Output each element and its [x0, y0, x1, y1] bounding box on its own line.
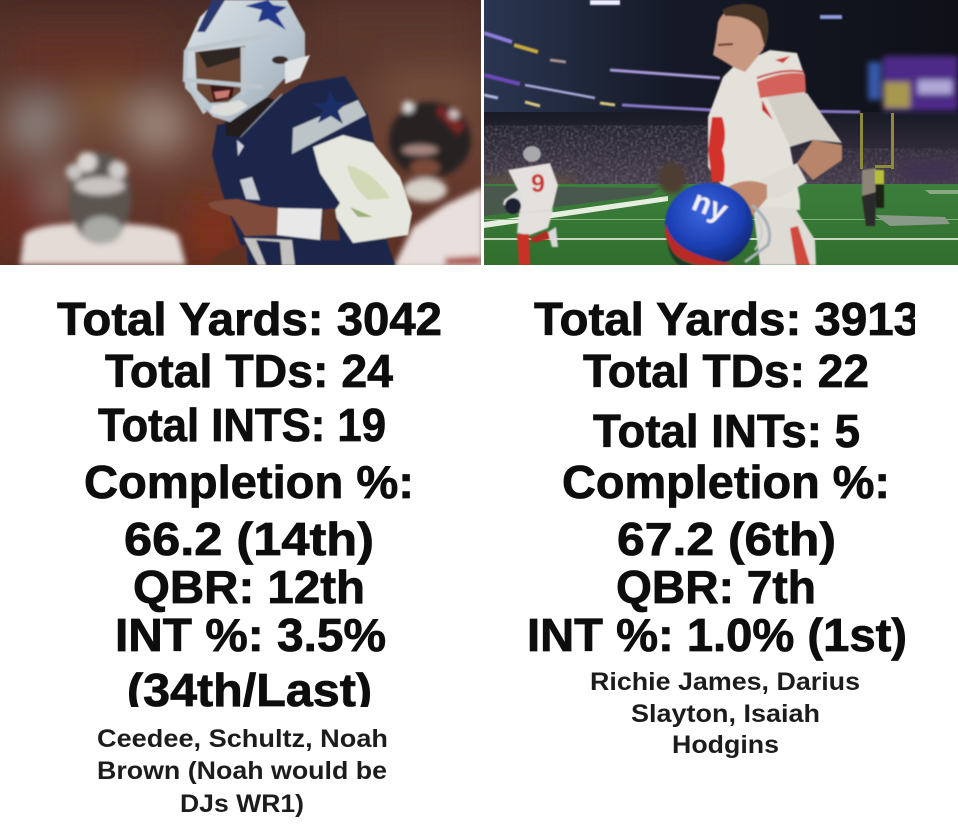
- neck: [225, 95, 275, 137]
- stats column: Dallas: [57, 293, 442, 818]
- photo: New York quarterback: [484, 0, 958, 266]
- runner number 9: [503, 146, 558, 265]
- receivers note: Richie James, Darius: [590, 668, 860, 696]
- face: [195, 46, 245, 103]
- stat: interception percent: INT %: 3.5%: [115, 609, 386, 661]
- stat: total yards: Total Yards: 3913: [534, 293, 920, 345]
- hand on helmet: [723, 181, 767, 216]
- navy jersey: [212, 76, 395, 265]
- stat: QBR: QBR: 12th: [133, 561, 365, 613]
- stats column: New York: [527, 293, 920, 759]
- stat: total touchdowns: Total TDs: 22: [583, 345, 869, 397]
- receivers note: Ceedee, Schultz, Noah: [97, 725, 388, 753]
- photographer: [658, 162, 686, 194]
- wrist sleeve: [792, 162, 808, 188]
- runner number 9: 9: [531, 170, 545, 198]
- stat: total interceptions: Total INTS: 19: [98, 399, 386, 451]
- grey arm sleeve: [767, 93, 842, 147]
- stat: completion value: 67.2 (6th): [617, 513, 836, 565]
- quarterback jones: [708, 4, 842, 265]
- helmet: [185, 0, 305, 122]
- stat: completion label: Completion %:: [84, 456, 414, 508]
- video board: [868, 56, 958, 111]
- pointing hand: [208, 199, 278, 236]
- referee: [862, 168, 884, 226]
- stat: total yards: Total Yards: 3042: [57, 293, 442, 345]
- jersey torso: [708, 50, 805, 210]
- goal posts: [860, 113, 894, 169]
- shorts: [753, 207, 816, 265]
- receivers note: [97, 725, 388, 818]
- stat: total interceptions: Total INTs: 5: [593, 405, 860, 457]
- stat: completion value: 66.2 (14th): [124, 513, 374, 565]
- stadium ribbon lights: [484, 0, 860, 112]
- sleeve stripes: [757, 73, 806, 98]
- arm sleeve: [313, 135, 412, 243]
- green field: [484, 184, 958, 265]
- receivers note: Slayton, Isaiah: [631, 700, 820, 728]
- wristband: [277, 208, 322, 240]
- forearm: [797, 140, 842, 180]
- skin forearm: [322, 208, 340, 240]
- facemask: [185, 35, 270, 113]
- blurred opponent right: [389, 101, 483, 268]
- football: [207, 245, 248, 265]
- receivers note: Brown (Noah would be: [97, 757, 387, 785]
- stadium crowd: [484, 112, 958, 190]
- quarterback: [185, 0, 412, 265]
- receivers note: [590, 668, 860, 759]
- head: [712, 12, 766, 72]
- stat: QBR: QBR: 7th: [616, 561, 816, 613]
- shoulder stripes and star: [292, 100, 366, 154]
- receivers note: Hodgins: [672, 731, 779, 759]
- number 8: [708, 117, 725, 182]
- Giants helmet: ny: [688, 184, 733, 228]
- photo: Dallas quarterback: [0, 0, 483, 268]
- blurred opponent left: [20, 152, 186, 265]
- stat: interception rank: (34th/Last): [127, 664, 372, 716]
- stat: completion label: Completion %:: [562, 456, 890, 508]
- Giants helmet: [665, 183, 770, 266]
- stat: interception percent and rank: INT %: 1.0% (1st): [527, 609, 907, 661]
- stat: total touchdowns: Total TDs: 24: [105, 345, 393, 397]
- receivers note: DJs WR1): [180, 790, 304, 818]
